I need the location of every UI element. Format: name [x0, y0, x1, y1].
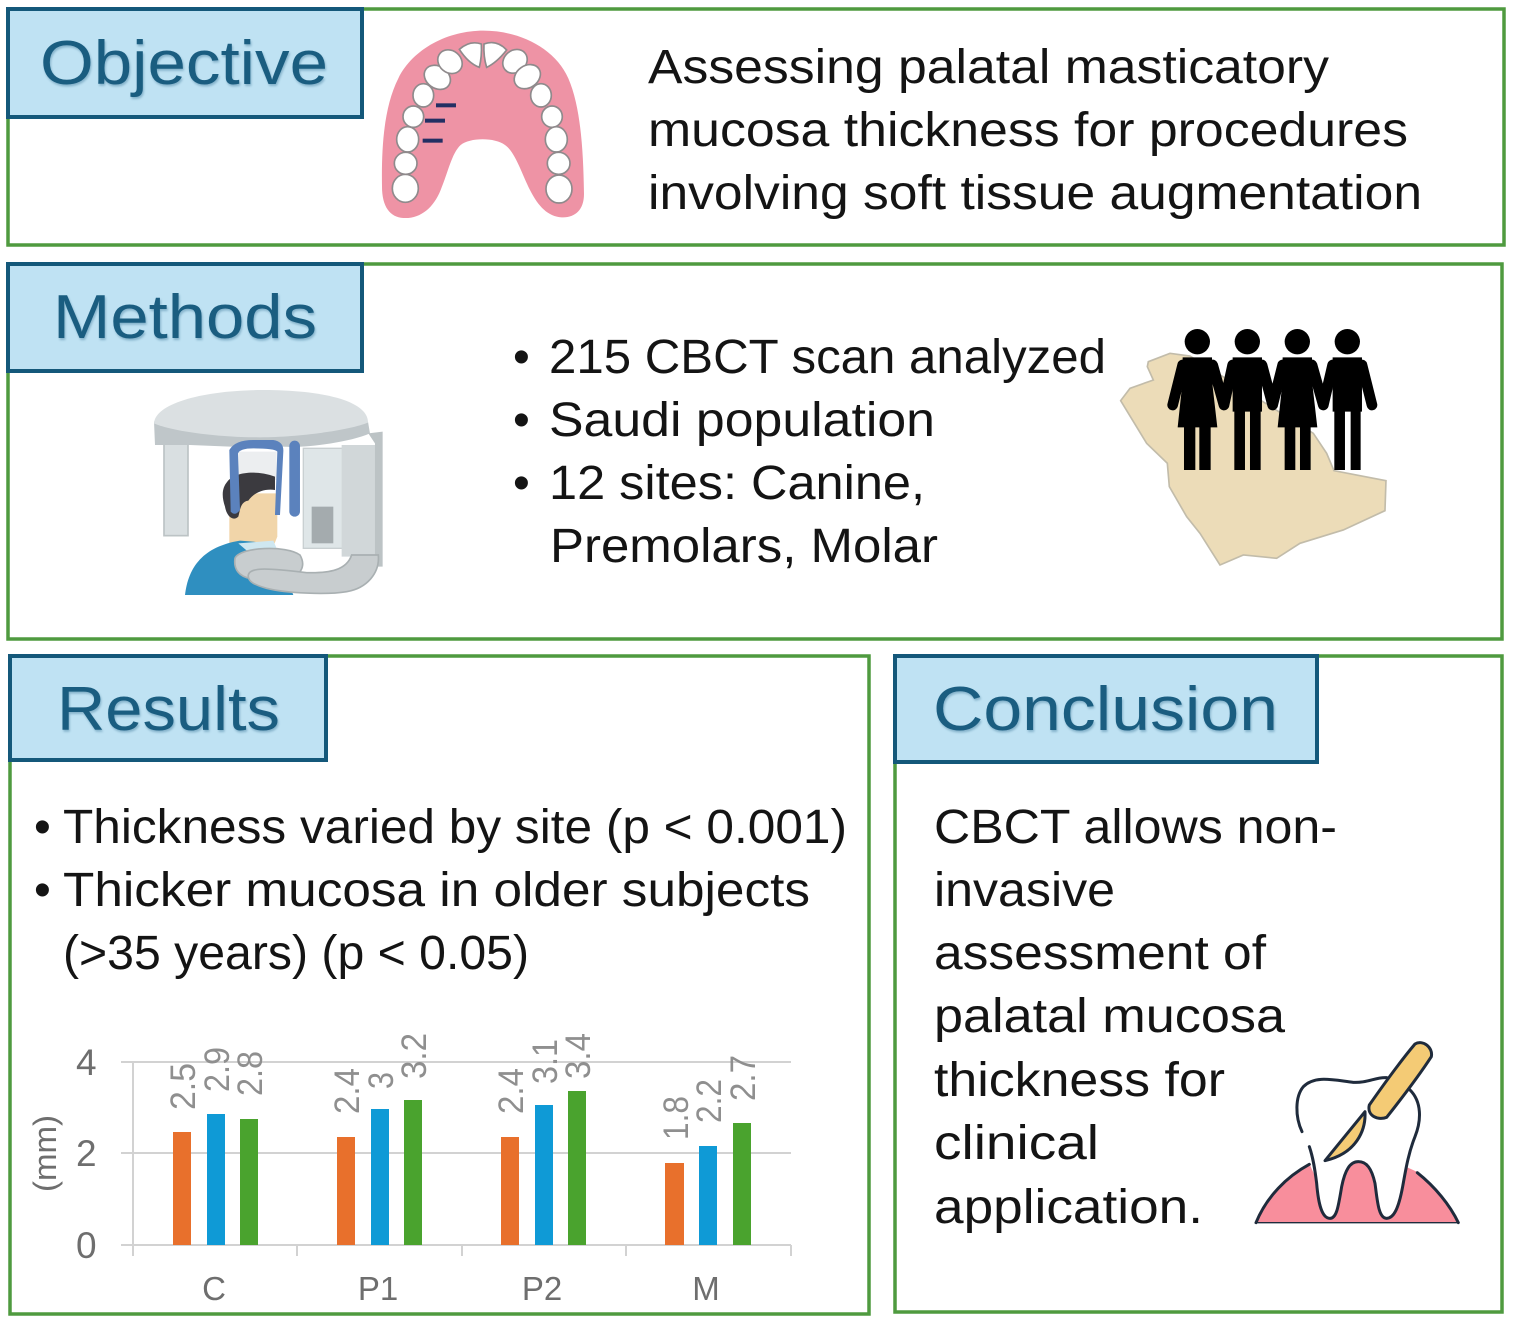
data labels: 2.7 [724, 1055, 763, 1101]
conclusion text: application. [934, 1181, 1203, 1234]
results bullet list: (>35 years) (p < 0.05) [63, 927, 529, 980]
data labels: 2.2 [690, 1079, 729, 1123]
data labels: 2.4 [492, 1068, 531, 1114]
methods bullet list: 215 CBCT scan analyzed [549, 331, 1106, 384]
y axis labels: 0 [76, 1225, 97, 1266]
panel: results [10, 656, 869, 1314]
methods bullet list: Premolars, Molar [550, 520, 938, 573]
data labels: 3.4 [559, 1033, 598, 1079]
data labels: 1.8 [657, 1096, 696, 1140]
x axis labels [202, 1270, 720, 1307]
results bullet list: Thickness varied by site (p < 0.001) [63, 801, 847, 854]
y axis labels: 2 [76, 1133, 97, 1174]
data labels: 2.8 [231, 1051, 270, 1096]
objective text: mucosa thickness for procedures [648, 104, 1408, 157]
x axis labels: P2 [522, 1270, 562, 1307]
methods bullet list: Saudi population [549, 394, 935, 447]
panel: methods [8, 264, 1502, 639]
data labels: 3.1 [526, 1039, 565, 1084]
conclusion text: invasive [934, 864, 1115, 917]
data labels: 2.4 [328, 1068, 367, 1114]
heading: results: Results [57, 675, 280, 744]
y axis labels: (mm) [27, 1115, 63, 1192]
conclusion text: assessment of [934, 927, 1267, 980]
icon: palate and teeth [382, 31, 584, 218]
panel: conclusion [895, 656, 1502, 1312]
objective text: involving soft tissue augmentation [648, 167, 1422, 220]
methods bullet list: 12 sites: Canine, [549, 457, 925, 510]
objective text [648, 41, 1422, 220]
results bullet list: • [34, 801, 51, 854]
icon: Saudi map with people [1121, 329, 1386, 565]
methods bullet list: • [513, 331, 530, 384]
blue bars [207, 1105, 717, 1245]
results bullet list: Thicker mucosa in older subjects [63, 864, 810, 917]
conclusion text: palatal mucosa [934, 990, 1285, 1043]
conclusion text: thickness for [934, 1054, 1225, 1107]
data labels: 2.9 [198, 1047, 237, 1092]
y axis labels: 4 [76, 1042, 97, 1083]
data labels [164, 1033, 763, 1140]
x axis labels: C [202, 1270, 226, 1307]
results bullet list [34, 801, 847, 980]
icon: tooth and scalpel [1255, 1043, 1458, 1223]
heading: results [10, 656, 326, 760]
results bullet list: • [34, 864, 51, 917]
methods bullet list: • [513, 457, 530, 510]
conclusion text [934, 801, 1337, 1234]
panel: objective [8, 9, 1504, 245]
heading: objective: Objective [40, 29, 328, 98]
conclusion text: CBCT allows non- [934, 801, 1337, 854]
heading: methods: Methods [53, 283, 317, 352]
heading: objective [8, 9, 362, 117]
methods bullet list: • [513, 394, 530, 447]
heading: conclusion [895, 656, 1317, 762]
heading: methods [8, 264, 362, 371]
data labels: 3.2 [395, 1033, 434, 1079]
methods bullet list [513, 331, 1106, 573]
objective text: Assessing palatal masticatory [648, 41, 1329, 94]
conclusion text: clinical [934, 1117, 1099, 1170]
orange bars [173, 1132, 684, 1245]
x axis labels: P1 [358, 1270, 398, 1307]
heading: conclusion: Conclusion [933, 675, 1278, 744]
icon: CBCT scanner with patient [154, 390, 383, 595]
green bars [240, 1091, 751, 1245]
x axis labels: M [692, 1270, 720, 1307]
data labels: 2.5 [164, 1063, 203, 1110]
bar chart: thickness by site [27, 1033, 791, 1307]
y axis labels [27, 1042, 97, 1266]
data labels: 3 [362, 1072, 401, 1089]
